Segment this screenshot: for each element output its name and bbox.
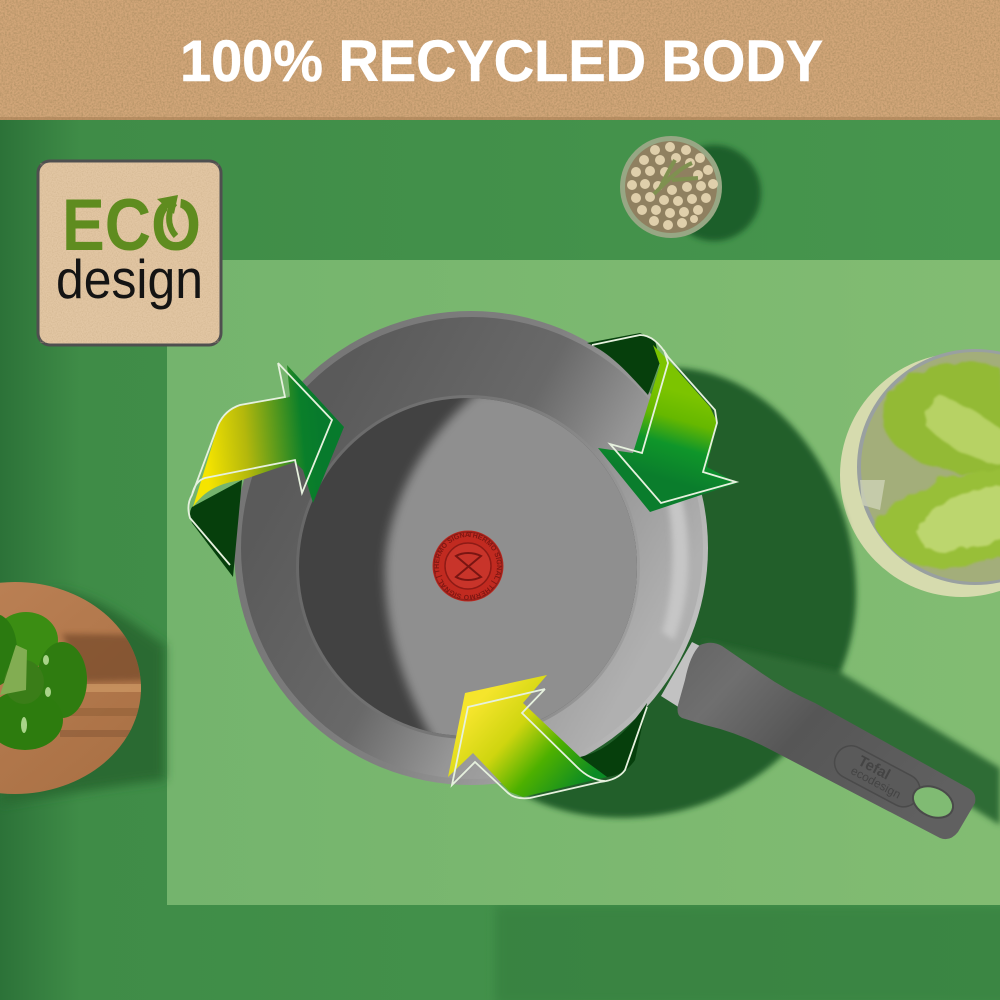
handle logo: ecodesign	[848, 763, 903, 801]
background: light green panel	[167, 260, 1000, 905]
badge: ECO design	[38, 161, 221, 345]
pan floor	[296, 395, 640, 739]
handle hole	[908, 780, 958, 824]
arrow: top left	[188, 363, 344, 577]
rosemary sprig	[654, 160, 698, 194]
badge text: design: design	[56, 248, 203, 310]
arrow: top right	[587, 333, 737, 512]
bowl: lettuce	[840, 349, 1000, 597]
arrow: bottom	[448, 675, 647, 798]
lettuce leaf top	[883, 362, 1000, 475]
handle logo	[829, 740, 926, 812]
board: wooden with pepper	[0, 582, 165, 805]
title: 100% RECYCLED BODY	[180, 29, 823, 94]
pepper	[0, 612, 87, 750]
bowl: peppercorns	[620, 136, 761, 241]
badge icon: recycling arrow in O	[157, 195, 181, 238]
shadow: pan	[500, 368, 856, 818]
thermo spot	[432, 530, 504, 602]
pan body	[234, 311, 708, 785]
handle ferrule	[661, 642, 708, 708]
board shadow	[0, 590, 165, 805]
shadow: handle	[700, 640, 1000, 825]
pan handle	[661, 642, 975, 839]
badge text: ECO: ECO	[62, 185, 201, 266]
handle logo: Tefal	[855, 753, 893, 783]
lettuce leaf bottom	[877, 468, 1000, 568]
bowl shadow	[667, 145, 761, 241]
header: kraft paper band	[0, 0, 1000, 120]
shadow: bottom band	[495, 905, 1000, 1000]
thermo spot: THERMO SIGNAL | THERMO SIGNAL | THERMO SIGNAL	[434, 532, 502, 600]
right highlight	[662, 470, 688, 640]
